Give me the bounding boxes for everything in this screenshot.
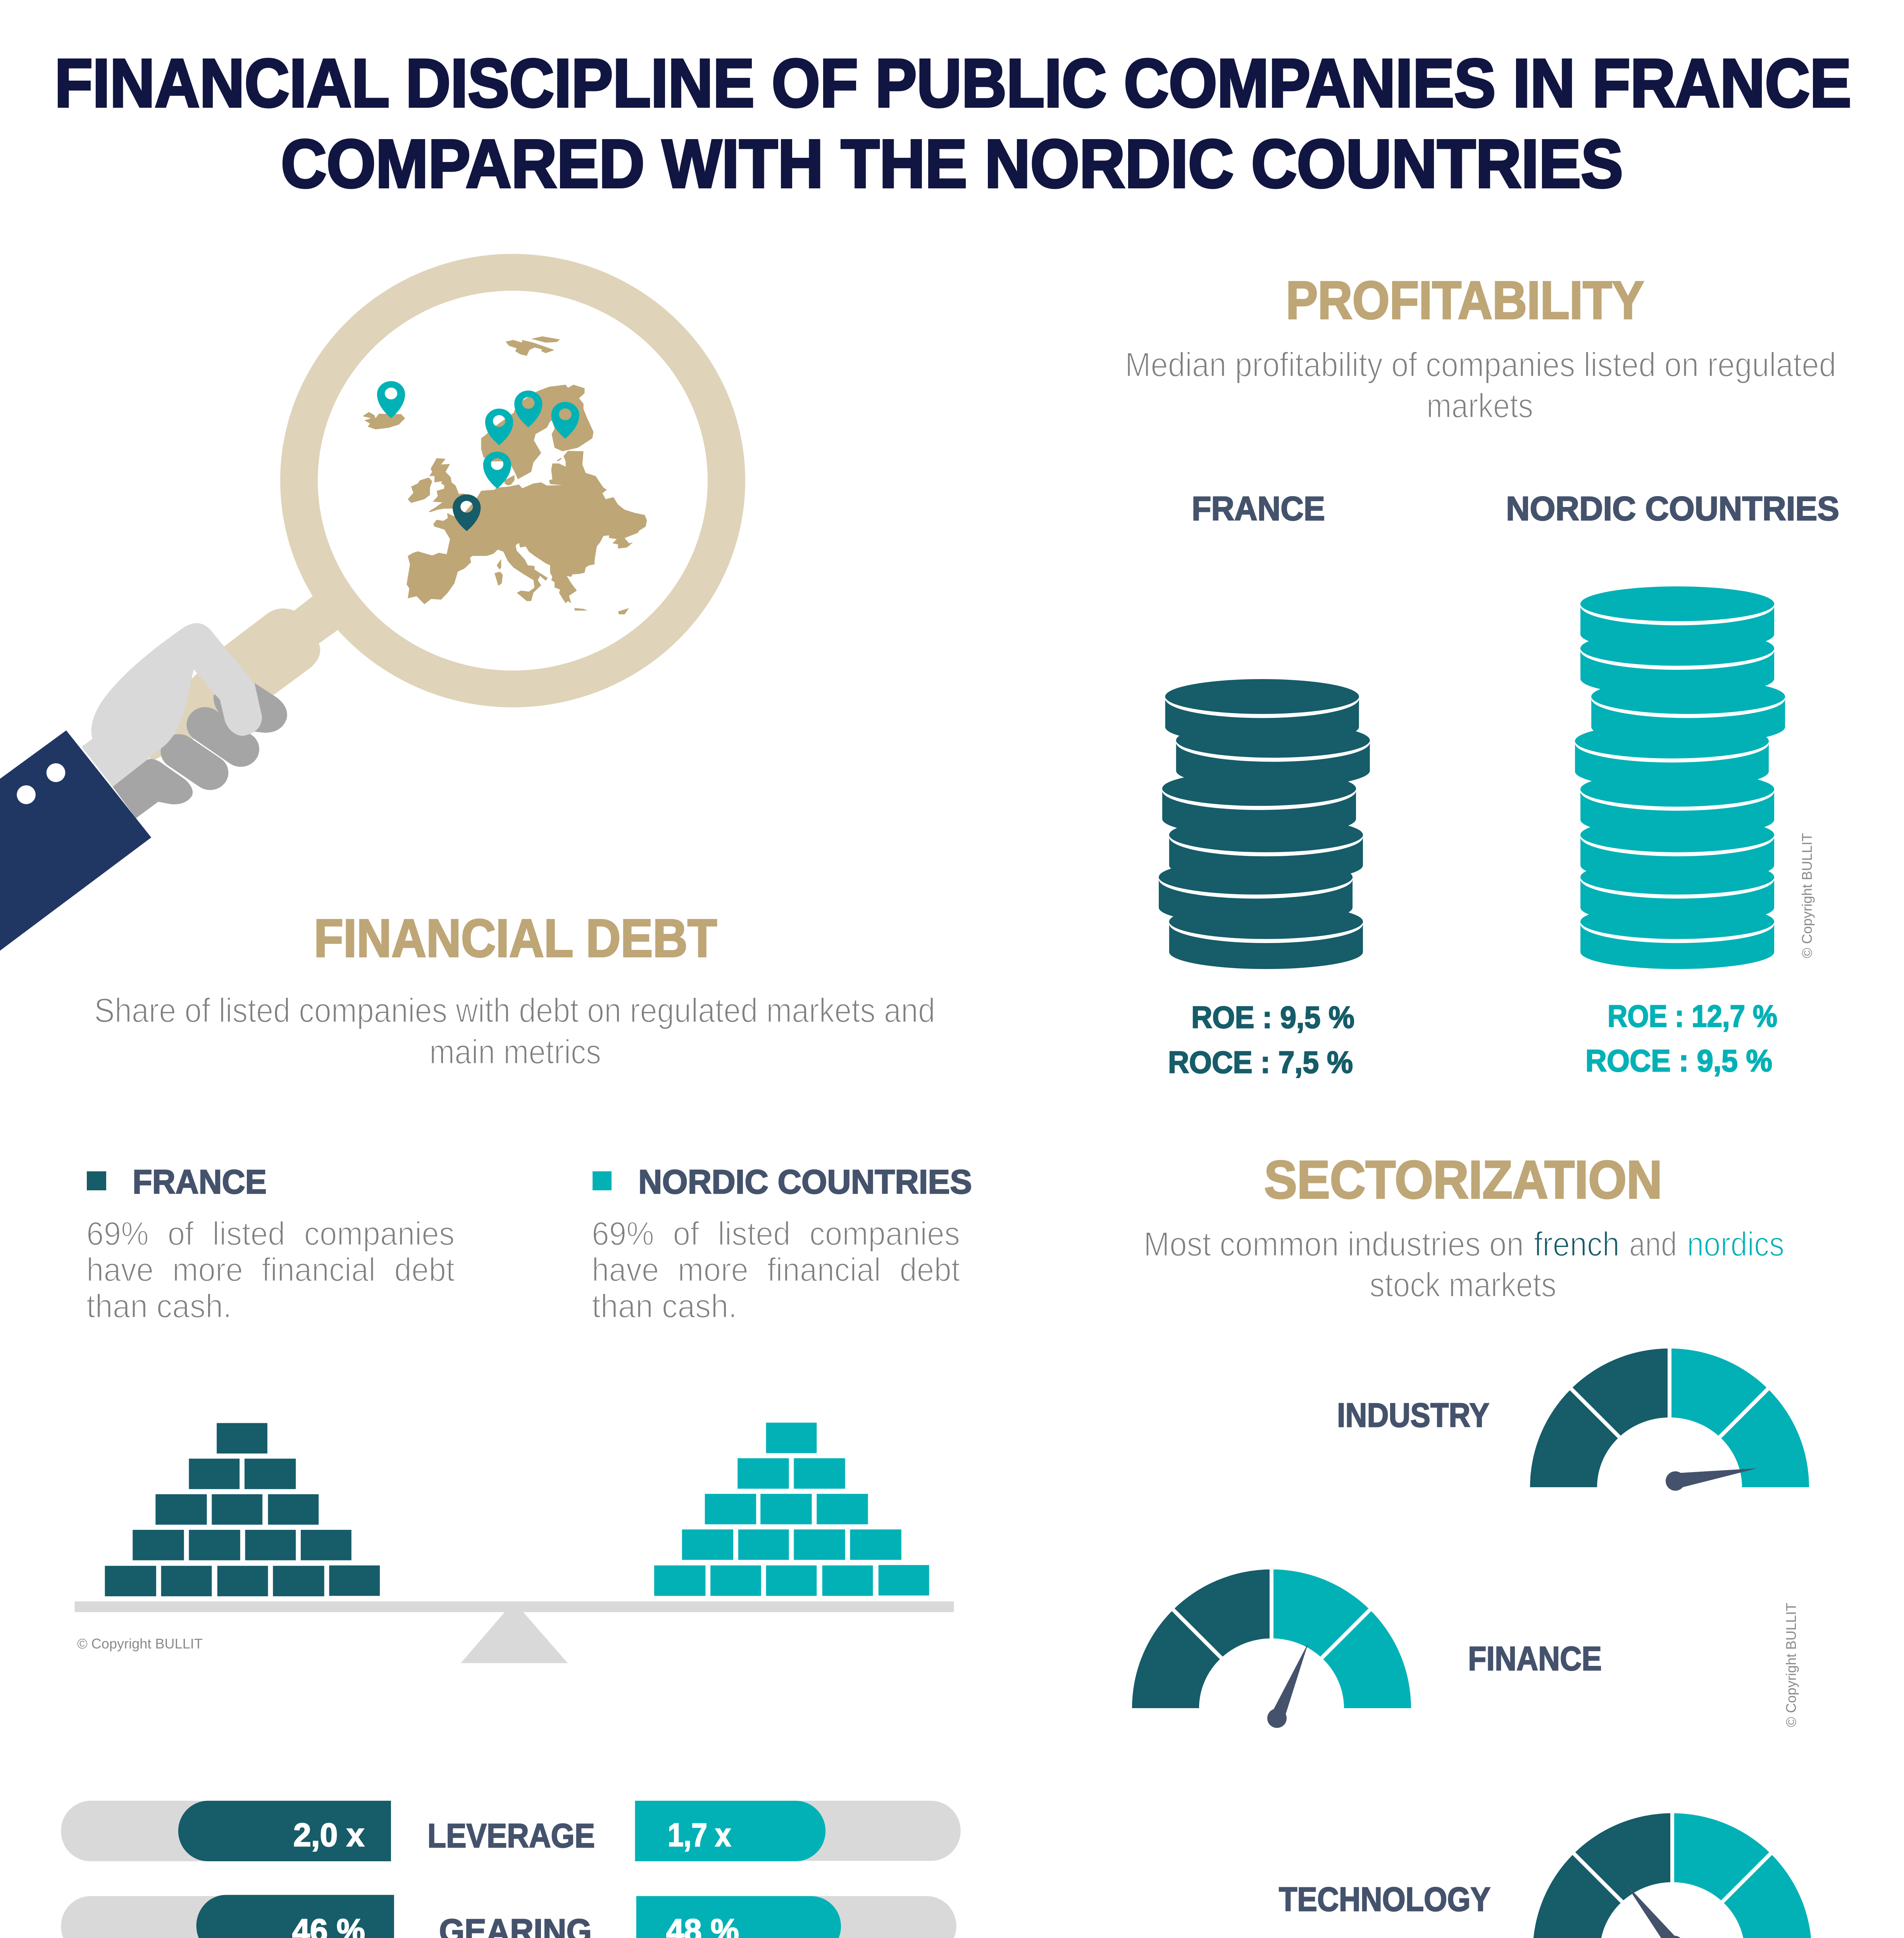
value: France leverage: 2,0 x [293,1817,364,1853]
grey fingers [113,683,287,818]
France coin stack [1159,679,1370,969]
France debt legend and text [86,1163,455,1325]
sectorization description: stock markets [1370,1266,1556,1304]
pin: France [453,494,481,531]
heading: sectorization: SECTORIZATION [1264,1150,1662,1210]
glove [81,623,262,787]
needle [1267,1643,1308,1728]
needle [1625,1883,1684,1938]
profitability description [1125,345,1836,425]
France ROE and ROCE: ROE : 9,5 % [1191,1000,1354,1035]
sectorization description: french [1534,1225,1620,1263]
scale beam [74,1602,954,1612]
map of Europe with pins [363,336,647,614]
label: finance: FINANCE [1468,1640,1602,1678]
Nordic paragraph: than cash. [592,1288,737,1325]
value: Nordic leverage: 1,7 x [668,1817,731,1853]
pin: Finland [551,402,579,439]
Nordic coin stack [1575,586,1785,969]
title: COMPARED WITH THE NORDIC COUNTRIES [281,126,1623,202]
cuff buttons [17,763,65,804]
copyright note: © Copyright BULLIT [77,1636,203,1652]
Nordic ROE and ROCE: ROE : 12,7 % [1608,999,1777,1033]
gearing bars [61,1894,956,1938]
gauge: industry [1530,1344,1809,1491]
heading: profitability: PROFITABILITY [1286,271,1644,330]
illustration: magnifying glass held by hand over Europe [0,254,745,951]
hand and handle [0,596,339,951]
leverage and gearing bars [61,1799,961,1938]
coin stacks [1159,586,1785,969]
pin: Norway [485,409,513,445]
France paragraph: have more financial debt [86,1252,455,1288]
needle [1666,1468,1758,1491]
sectorization description: nordics [1687,1225,1784,1263]
financial debt description: main metrics [429,1033,601,1071]
title [55,45,1851,202]
magnifier lens ring [280,254,745,707]
Nordic paragraph: 69% of listed companies [592,1216,960,1252]
sectorization description: and [1629,1225,1677,1263]
profitability description: markets [1427,386,1533,425]
suit cuff [0,730,151,951]
scale fulcrum [461,1602,568,1663]
column label: France: FRANCE [1192,490,1325,528]
Nordic ROE and ROCE: ROCE : 9,5 % [1585,1043,1772,1078]
Nordic paragraph: have more financial debt [592,1252,960,1288]
Nordic debt legend and text [592,1163,972,1325]
sectorization description: Most common industries on [1144,1225,1524,1263]
Europe landmass [363,336,647,614]
France paragraph: than cash. [86,1288,232,1325]
France legend square [87,1171,106,1190]
France paragraph: 69% of listed companies [86,1216,455,1252]
gauge: technology [1533,1809,1812,1938]
column label: Nordic countries: NORDIC COUNTRIES [1506,490,1839,528]
Nordic brick pyramid [654,1422,929,1596]
leverage bars [61,1799,961,1863]
France ROE and ROCE [1168,1000,1354,1079]
France paragraph [86,1216,455,1325]
profitability description: Median profitability of companies listed on regulated [1125,345,1836,384]
pin: Iceland [377,381,405,418]
pin: Sweden [514,391,542,427]
balance scale with brick pyramids [74,1422,954,1663]
heading: financial debt: FINANCIAL DEBT [314,909,717,968]
copyright note, vertical: © Copyright BULLIT [1783,1603,1799,1727]
label: technology: TECHNOLOGY [1279,1881,1490,1918]
pin: Denmark [483,452,511,489]
label: leverage: LEVERAGE [427,1817,595,1855]
sectorization description [1144,1225,1784,1304]
Nordic legend square [593,1171,612,1190]
France brick pyramid [105,1423,380,1596]
France ROE and ROCE: ROCE : 7,5 % [1168,1045,1353,1079]
copyright note, vertical: © Copyright BULLIT [1799,833,1815,958]
financial debt description: Share of listed companies with debt on regulated markets and [94,991,935,1029]
magnifier handle [148,596,339,763]
gauge: finance [1132,1565,1411,1728]
financial debt description [94,991,935,1071]
France label: FRANCE [133,1163,267,1201]
Nordic paragraph [592,1216,960,1325]
label: industry: INDUSTRY [1337,1397,1489,1434]
Nordic label: NORDIC COUNTRIES [638,1163,972,1201]
Nordic ROE and ROCE [1585,999,1777,1078]
